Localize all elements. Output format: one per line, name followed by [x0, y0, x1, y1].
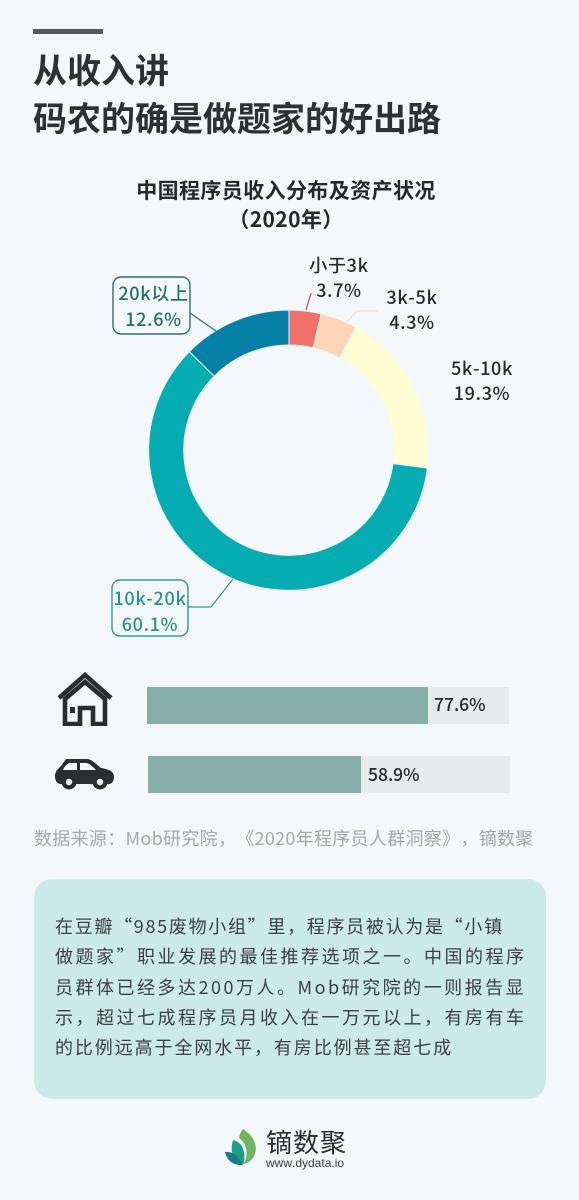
label: 20k and above: 12.6% [125, 306, 182, 332]
data source note: 数据来源：Mob研究院，《2020年程序员人群洞察》，镝数聚 [34, 825, 534, 851]
body text: 在豆瓣“985废物小组”里，程序员被认为是“小镇 [55, 913, 504, 939]
label: 10k-20k [113, 585, 187, 637]
callout box: 20k and above [113, 277, 190, 334]
leader line: 10k-20k [188, 579, 233, 607]
label: 5k-10k: 19.3% [454, 380, 510, 406]
top accent bar [33, 29, 103, 34]
label: under 3k [309, 252, 369, 303]
logo name: 镝数聚 [266, 1123, 347, 1160]
leader line: 20k and above [190, 313, 216, 331]
house bar value [147, 687, 428, 724]
label: under 3k: 3.7% [316, 277, 362, 303]
label: 5k-10k: 5k-10k [451, 355, 513, 381]
body text [55, 913, 526, 1060]
segment: 3k-5k [313, 314, 356, 358]
segment: 20k and above [189, 310, 289, 376]
car value label: 58.9% [368, 762, 420, 787]
body text: 的比例远高于全网水平，有房比例甚至超七成 [55, 1034, 453, 1060]
icon: house [58, 672, 112, 726]
house value label: 77.6% [434, 692, 486, 717]
donut chart [111, 276, 428, 637]
title: 码农的确是做题家的好出路 [33, 92, 441, 141]
icon: logo leaves [225, 1129, 256, 1166]
chart title [136, 175, 436, 234]
body text: 示，超过七成程序员月收入在一万元以上，有房有车 [55, 1004, 526, 1030]
segment: 5k-10k [340, 327, 429, 468]
chart title: 中国程序员收入分布及资产状况 [136, 175, 436, 205]
house bar track [147, 687, 509, 724]
label: under 3k: 小于3k [309, 252, 369, 278]
logo url: www.dydata.io [266, 1156, 344, 1170]
car bar track [148, 756, 510, 793]
callout box: 10k-20k [112, 580, 188, 636]
title [33, 44, 441, 141]
label: 5k-10k [451, 355, 513, 406]
logo [225, 1123, 347, 1170]
label: 20k and above [118, 280, 189, 332]
segment: under 3k [289, 310, 321, 348]
label: 3k-5k [386, 284, 438, 335]
label: 10k-20k: 60.1% [122, 611, 178, 637]
label: 10k-20k: 10k-20k [113, 585, 187, 611]
label: 3k-5k: 3k-5k [386, 284, 438, 310]
leader line: under 3k [306, 293, 311, 310]
body text: 做题家”职业发展的最佳推荐选项之一。中国的程序 [55, 943, 526, 969]
segment: 10k-20k [149, 352, 428, 590]
label: 20k and above: 20k以上 [118, 280, 189, 306]
body text: 员群体已经多达200万人。Mob研究院的一则报告显 [55, 974, 526, 1000]
label: 3k-5k: 4.3% [389, 309, 435, 335]
leader line: 3k-5k [347, 311, 378, 322]
chart title: （2020年） [228, 204, 344, 234]
panel: description [34, 879, 546, 1099]
title: 从收入讲 [33, 44, 169, 93]
icon: car [55, 759, 114, 790]
car bar value [148, 756, 361, 793]
